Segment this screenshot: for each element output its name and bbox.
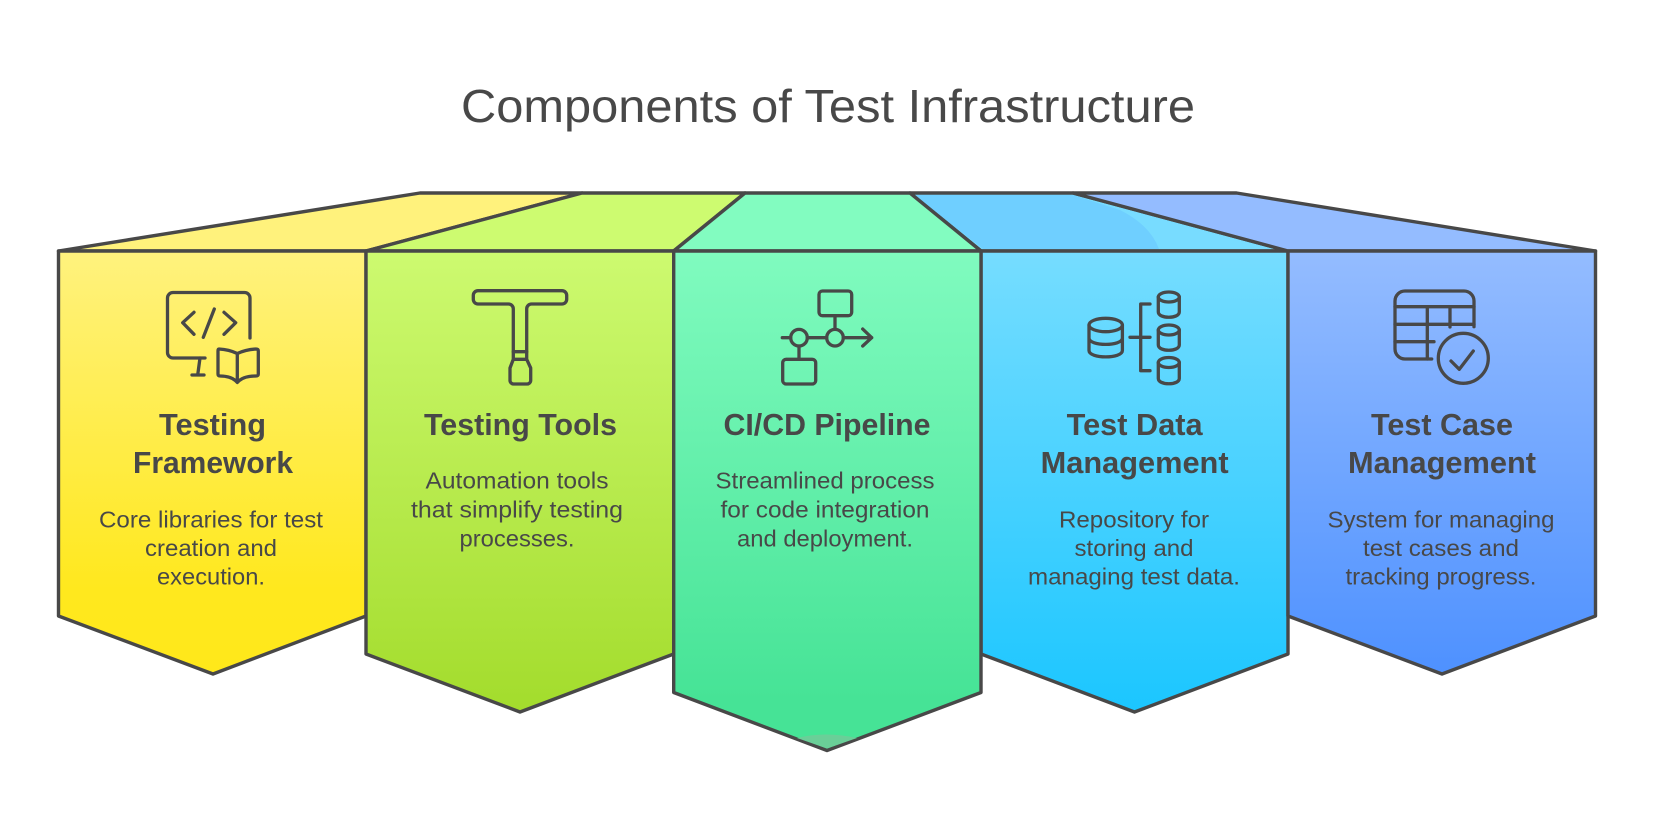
description: test case management: test cases and: [1363, 535, 1519, 561]
heading: ci/cd pipeline: CI/CD Pipeline: [724, 407, 930, 442]
description: test case management: tracking progress.: [1346, 564, 1536, 590]
top face: testing framework: [58, 193, 582, 251]
title: Components of Test Infrastructure: [461, 80, 1195, 132]
icon: monitor with code and book: [168, 292, 258, 382]
description: test data management: storing and: [1074, 535, 1194, 561]
icon: pipeline flow: [782, 291, 872, 384]
heading: test data management: Test Data: [1067, 407, 1203, 442]
description: test data management: Repository for: [1059, 506, 1209, 532]
description: testing framework: creation and: [145, 535, 277, 561]
panel: testing framework: [58, 193, 582, 674]
panel: test case management: [1073, 193, 1596, 674]
top face: ci/cd pipeline: [674, 193, 981, 251]
tip shading: [797, 734, 857, 748]
top face: testing tools: [366, 193, 745, 251]
column body: testing framework: [58, 251, 366, 674]
top face: test case management: [1073, 193, 1596, 251]
heading: testing framework: Framework: [133, 445, 294, 480]
heading: test case management: Test Case: [1371, 407, 1513, 442]
heading: test data management: Management: [1041, 445, 1229, 480]
top face: test data management: [910, 193, 1288, 251]
panel: ci/cd pipeline: [674, 193, 981, 750]
column body: test data management: [981, 251, 1288, 712]
description: testing tools: Automation tools: [426, 468, 608, 494]
column body: ci/cd pipeline: [674, 251, 981, 750]
panel: test data management: [910, 193, 1288, 712]
column body: test case management: [1288, 251, 1596, 674]
heading: testing tools: Testing Tools: [424, 407, 617, 442]
description: ci/cd pipeline: for code integration: [720, 496, 930, 522]
panel: testing tools: [366, 193, 745, 712]
column body: testing tools: [366, 251, 674, 712]
icon: table with check: [1395, 291, 1488, 383]
top face shading: [914, 195, 1159, 249]
description: ci/cd pipeline: and deployment.: [737, 526, 913, 552]
description: ci/cd pipeline: Streamlined process: [716, 468, 934, 494]
heading: testing framework: Testing: [159, 407, 266, 442]
description: testing tools: that simplify testing: [411, 496, 623, 522]
description: testing framework: Core libraries for test: [99, 506, 324, 532]
icon: databases: [1089, 292, 1179, 384]
description: test data management: managing test data.: [1028, 564, 1240, 590]
heading: test case management: Management: [1348, 445, 1536, 480]
icon: t-handle wrench: [473, 291, 567, 384]
description: test case management: System for managing: [1328, 506, 1554, 532]
description: testing framework: execution.: [157, 564, 265, 590]
description: testing tools: processes.: [460, 526, 574, 552]
